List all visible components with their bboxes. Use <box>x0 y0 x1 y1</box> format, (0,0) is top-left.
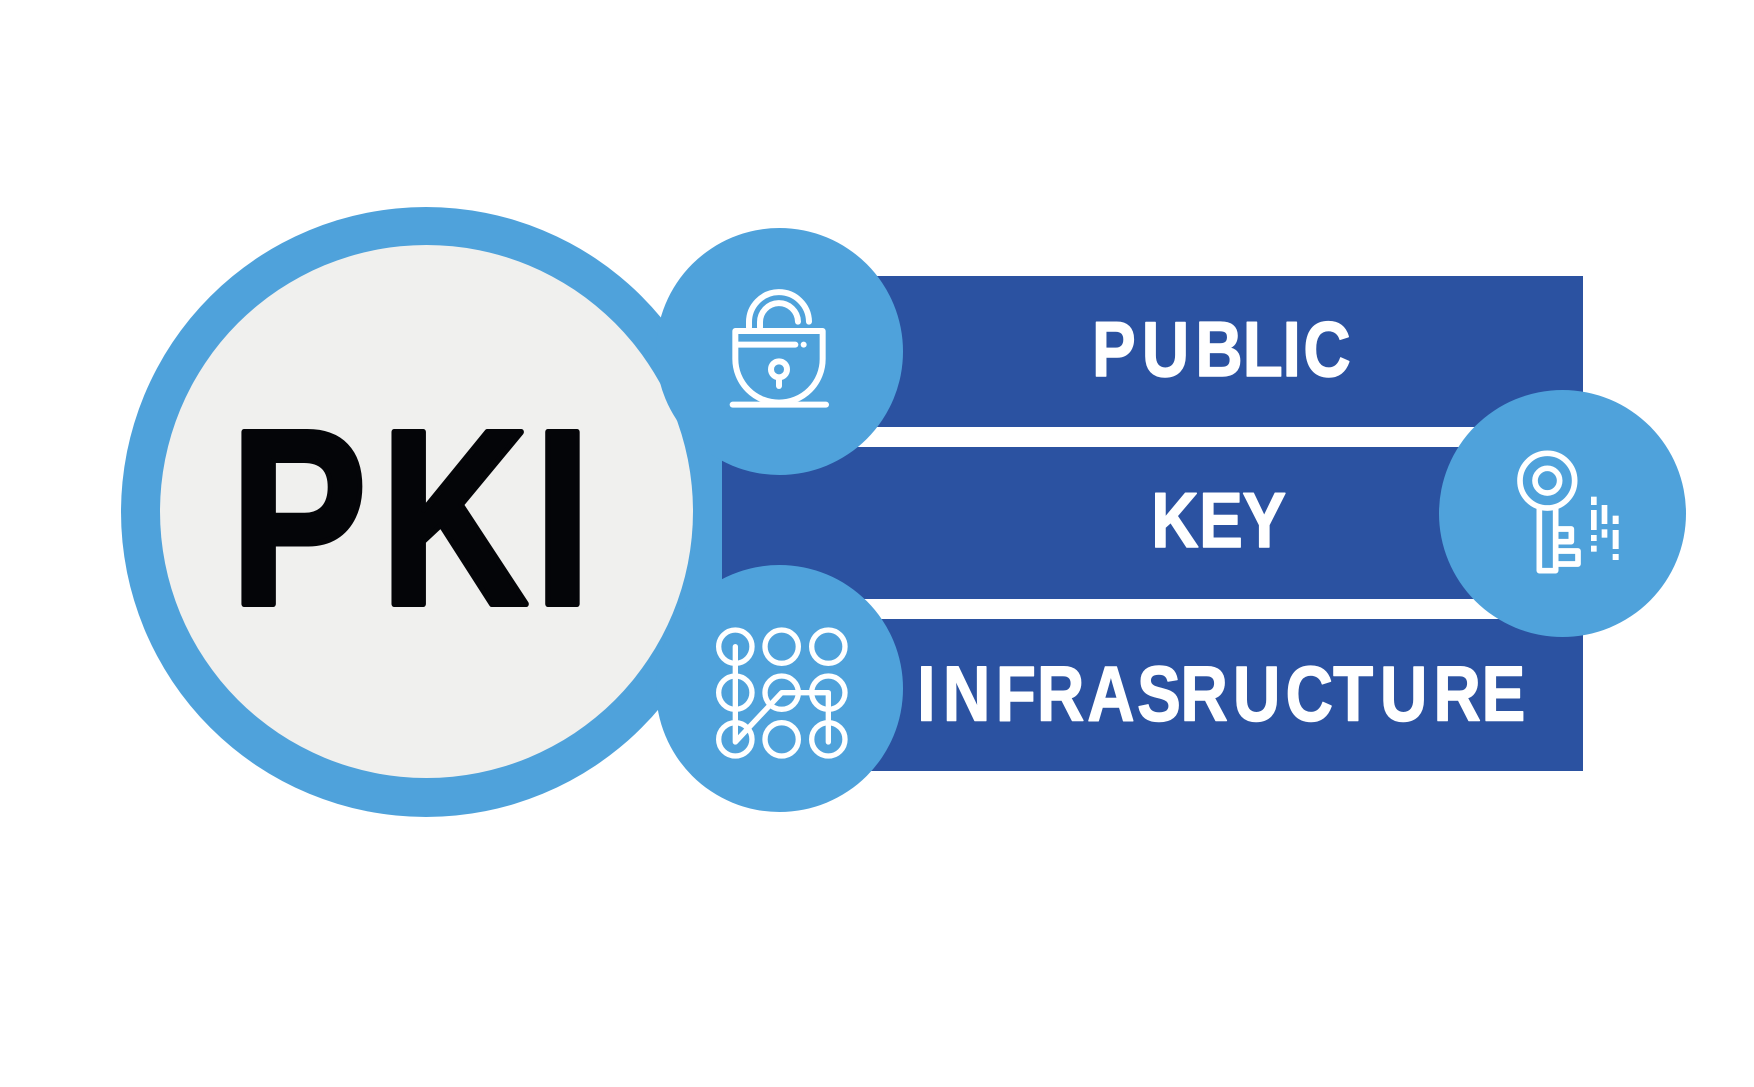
bar: infrastructure <box>722 619 1583 771</box>
PKI inner disc <box>160 245 693 778</box>
icon badge: padlock <box>656 228 903 475</box>
label: PUBLIC: PUBLIC <box>1092 307 1351 394</box>
label: KEY: KEY <box>1151 478 1286 565</box>
label: INFRASRUCTURE: INFRASRUCTURE <box>917 651 1525 738</box>
bar: key <box>722 447 1583 599</box>
icon: connected dots pattern <box>719 630 845 756</box>
icon: padlock <box>733 292 826 405</box>
PKI outer ring <box>121 207 731 817</box>
icon badge: key <box>1439 390 1686 637</box>
icon badge: pattern grid <box>656 565 903 812</box>
icon: key with data bits <box>1520 453 1619 571</box>
bar: public <box>722 276 1583 427</box>
title: PKI: PKI <box>230 379 591 658</box>
